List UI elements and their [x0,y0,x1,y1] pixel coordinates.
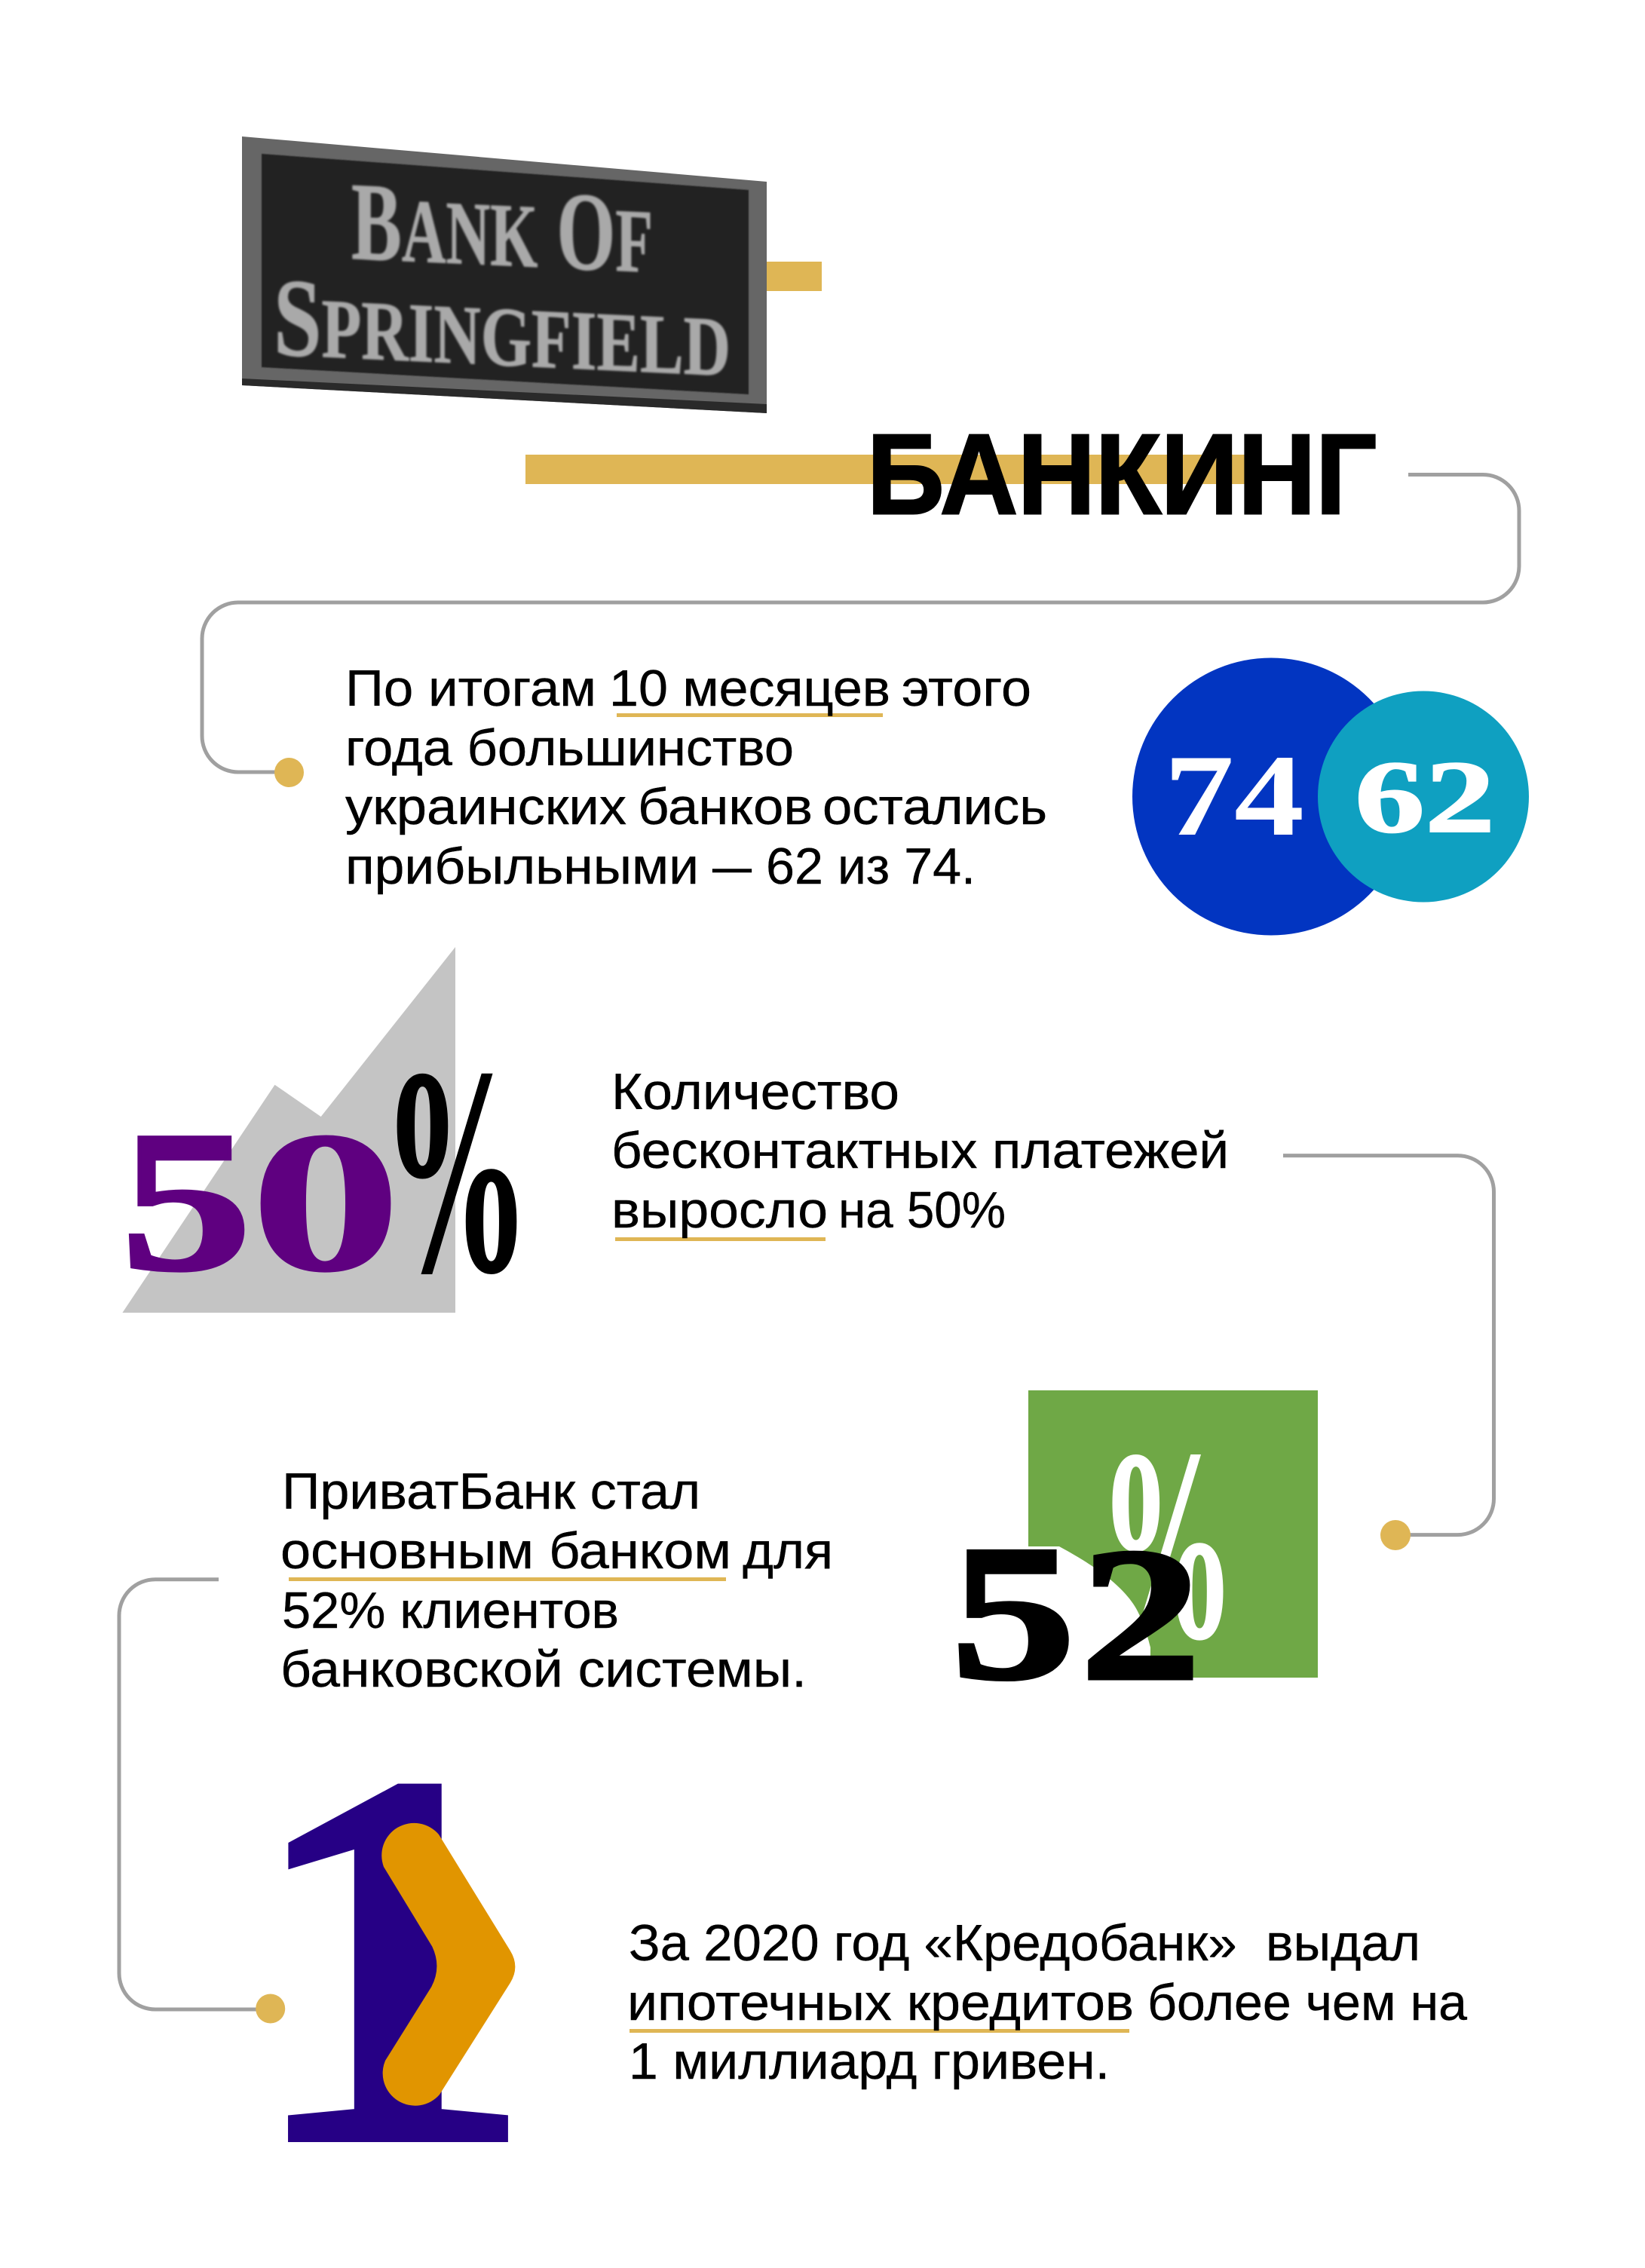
underline: 10 месяцев [617,713,883,717]
text block: contactless payments [611,1063,1229,1241]
underline: основным банком [289,1577,726,1581]
chart: 52% green square [951,1390,1318,1720]
title: БАНКИНГ [867,410,1377,538]
text block: PrivatBank [280,1463,833,1698]
text block: 10 months: 10 месяцев [609,660,890,717]
text block: 10 months: прибыльными [345,838,699,895]
text block: contactless payments: выросло [611,1182,828,1239]
text block: Kredobank [627,1914,1467,2090]
chart: 52% green square: 2 [1080,1509,1201,1720]
chart: 52% green square: % [1110,1406,1226,1695]
text block: 10 months: банков [638,778,813,835]
chart: 50% growth shape: % [394,1022,520,1333]
text block: 10 months: этого [902,660,1031,717]
text block: 10 months: года большинство [345,719,794,777]
gold accent bar: small [767,262,822,291]
chart: circles 74 and 62: 62 [1355,740,1495,854]
text block: 10 months: остались [822,778,1047,835]
text block: Kredobank: ипотечных кредитов [627,1974,1134,2031]
connector: title to first block [202,475,1519,787]
text block: 10 months: — [712,838,752,895]
text block: Kredobank: 1 миллиард гривен. [629,2033,1110,2090]
text block: 10 months: украинских [345,778,626,835]
chart: numeral 1 with chevron: 1 [244,1662,536,2256]
text block: 10 months [345,660,1047,895]
chart: circles 74 and 62 [1132,657,1529,935]
text block: PrivatBank: для [743,1522,833,1580]
connector: third block to fourth [119,1580,285,2024]
underline: ипотечных кредитов [630,2029,1129,2033]
chart: 50% growth shape [121,947,520,1333]
image: Bank of Springfield sign [242,136,767,413]
chart: 52% green square: 5 [951,1506,1076,1719]
text block: PrivatBank: ПриватБанк стал [282,1463,700,1520]
text block: Kredobank: более чем на [1147,1974,1467,2031]
gold accent bar behind title [525,455,1245,484]
text block: PrivatBank: 52% клиентов [282,1582,619,1639]
text block: contactless payments: бесконтактных платежей [611,1122,1229,1179]
underline: выросло [615,1237,826,1241]
connector: second block to third [1283,1156,1494,1550]
chart: 50% growth shape: 0 [250,1090,401,1313]
text block: contactless payments: Количество [611,1063,899,1120]
text block: 10 months: 62 из 74. [766,838,976,895]
text block: Kredobank: За 2020 год «Кредобанк» выдал [629,1914,1420,1972]
text block: contactless payments: на 50% [838,1182,1006,1239]
text block: PrivatBank: банковской системы. [280,1641,807,1698]
text block: PrivatBank: основным банком [280,1522,731,1580]
chart: 50% growth shape: 5 [121,1090,252,1313]
text block: 10 months: По итогам [345,660,596,717]
image: Bank of Springfield sign: SPRINGFIELD [274,256,731,400]
chart: circles 74 and 62: 74 [1164,731,1304,860]
image: Bank of Springfield sign: BANK OF [351,160,653,297]
